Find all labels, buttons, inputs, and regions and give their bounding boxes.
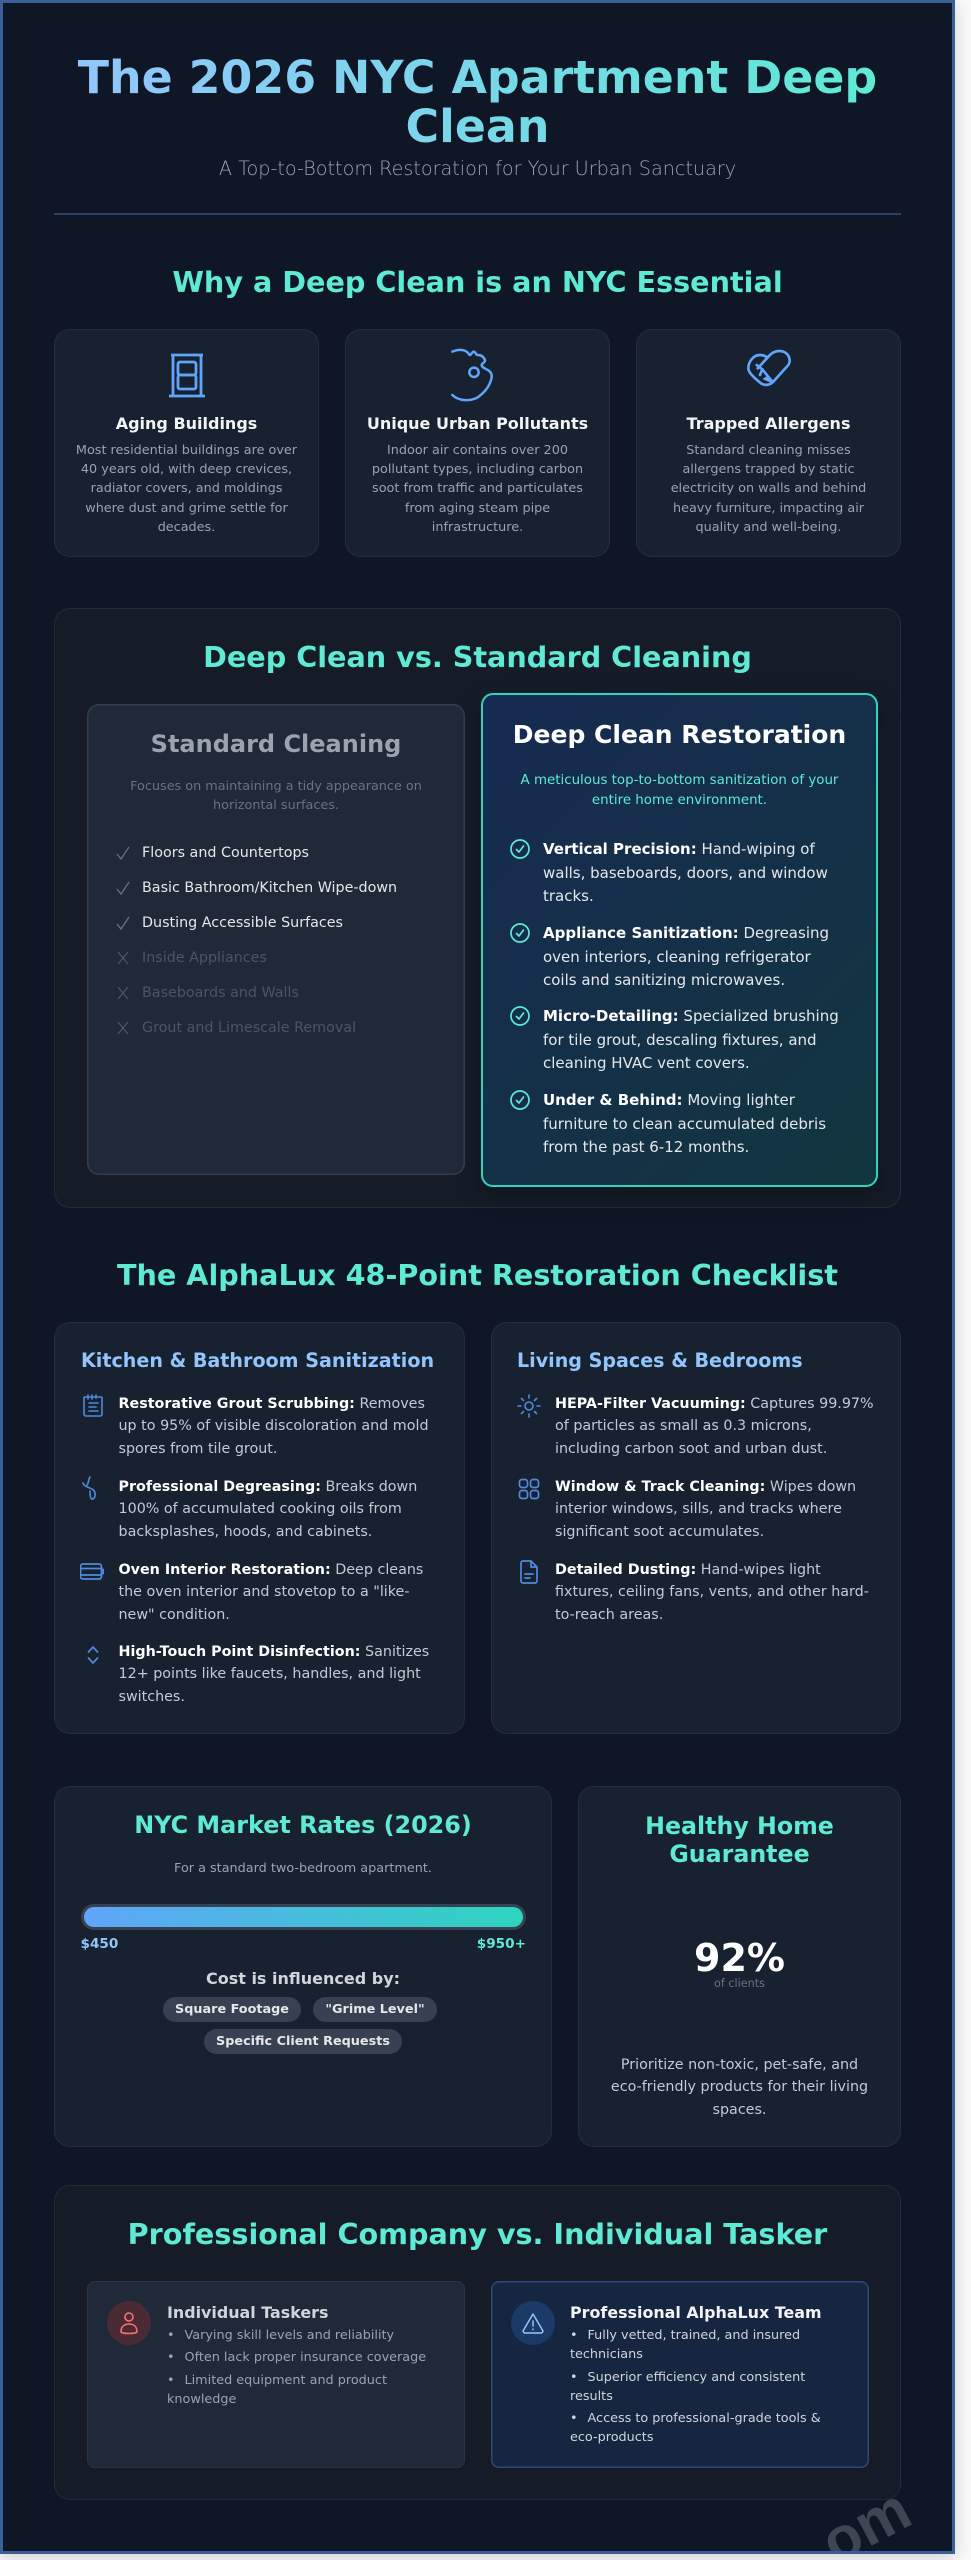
panel: company vs tasker — [54, 2185, 901, 2500]
included item: Floors and Countertops — [142, 845, 309, 861]
chip: "Grime Level" — [325, 2002, 425, 2017]
standard description — [130, 779, 422, 813]
standard title: Standard Cleaning — [151, 730, 401, 758]
checklist item: 100% of accumulated cooking oils from — [118, 1501, 402, 1517]
panel: market rates — [54, 1786, 552, 2147]
feature — [543, 840, 828, 905]
panel heading: Healthy Home — [645, 1812, 834, 1840]
team list: Access to professional-grade tools & — [588, 2411, 821, 2426]
checklist item — [555, 1562, 869, 1623]
team list: results — [570, 2389, 613, 2404]
tasker list: • — [167, 2328, 175, 2343]
card text: pollutant types, including carbon — [372, 462, 583, 477]
feature — [543, 924, 829, 989]
team list: • — [570, 2411, 578, 2426]
card title: Trapped Allergens — [687, 414, 850, 433]
icon: circle check — [510, 1006, 530, 1026]
deep clean description: A meticulous top-to-bottom sanitization of your — [521, 773, 838, 788]
included item: Dusting Accessible Surfaces — [142, 915, 343, 931]
checklist item: significant soot accumulates. — [555, 1524, 764, 1540]
feature: Under & Behind: Moving lighter — [543, 1091, 795, 1109]
deep clean description — [520, 773, 838, 808]
card text: allergens trapped by static — [682, 462, 855, 477]
high price: $950+ — [477, 1936, 526, 1952]
low price: $450 — [80, 1936, 118, 1952]
tasker list: Varying skill levels and reliability — [184, 2328, 394, 2343]
feature: for tile grout, descaling fixtures, and — [543, 1031, 817, 1049]
checklist item: High-Touch Point Disinfection: Sanitizes — [118, 1644, 429, 1660]
tasker list — [167, 2328, 426, 2407]
heading: Deep Clean vs. Standard Cleaning — [203, 640, 752, 674]
checklist item: Oven Interior Restoration: Deep cleans — [118, 1562, 423, 1578]
card text — [372, 443, 583, 535]
card title: Aging Buildings — [116, 414, 257, 433]
checklist item: Professional Degreasing: Breaks down — [118, 1479, 417, 1495]
card text: where dust and grime settle for — [85, 501, 288, 516]
heading: checklist: The AlphaLux 48-Point Restoration Checklist — [117, 1258, 838, 1292]
included item: Basic Bathroom/Kitchen Wipe-down — [142, 880, 397, 896]
icon: check — [116, 916, 130, 930]
card text: quality and well-being. — [696, 520, 841, 535]
icon: degrease — [82, 1476, 96, 1500]
checklist item: interior windows, sills, and tracks where — [555, 1501, 842, 1517]
feature: tracks. — [543, 887, 594, 905]
card text: Most residential buildings are over — [76, 443, 297, 458]
guarantee text: spaces. — [713, 2102, 766, 2118]
checklist item — [555, 1396, 874, 1457]
card text: decades. — [158, 520, 215, 535]
card text: infrastructure. — [432, 520, 523, 535]
icon: circle check — [510, 1090, 530, 1110]
panel: kitchen and bathroom — [54, 1322, 465, 1734]
feature: Micro-Detailing: Specialized brushing — [543, 1007, 839, 1025]
panel: trapped allergens — [636, 329, 901, 557]
team list: • — [570, 2328, 578, 2343]
feature — [543, 1007, 839, 1072]
checklist item: the oven interior and stovetop to a "like- — [118, 1584, 410, 1600]
panel title: Living Spaces & Bedrooms — [517, 1349, 803, 1372]
feature: Appliance Sanitization: Degreasing — [543, 924, 829, 942]
panel: living spaces — [491, 1322, 901, 1734]
checklist item — [118, 1396, 429, 1457]
icon: circle check — [510, 923, 530, 943]
panel: healthy home guarantee — [578, 1786, 901, 2147]
checklist item: backsplashes, hoods, and cabinets. — [118, 1524, 372, 1540]
standard description: horizontal surfaces. — [213, 798, 339, 813]
checklist item — [118, 1562, 423, 1623]
checklist item: including carbon soot and urban dust. — [555, 1441, 827, 1457]
checklist item: to-reach areas. — [555, 1607, 663, 1623]
tasker list: Often lack proper insurance coverage — [184, 2350, 426, 2365]
icon: up down chevrons — [88, 1646, 98, 1664]
panel: aging buildings — [54, 329, 319, 557]
checklist item — [118, 1479, 417, 1540]
tasker list: knowledge — [167, 2392, 236, 2407]
tasker list: • — [167, 2350, 175, 2365]
icon: check — [116, 882, 130, 895]
icon: cross — [118, 986, 128, 1000]
checklist item: Detailed Dusting: Hand-wipes light — [555, 1562, 821, 1578]
icon: alert triangle — [511, 2301, 555, 2345]
subtitle: A Top-to-Bottom Restoration for Your Urban Sanctuary — [219, 157, 736, 180]
title: The 2026 NYC Apartment Deep — [78, 50, 877, 104]
team list: eco-products — [570, 2430, 653, 2445]
tasker title: Individual Taskers — [167, 2303, 328, 2322]
checklist item: Window & Track Cleaning: Wipes down — [555, 1479, 856, 1495]
checklist item: new" condition. — [118, 1607, 230, 1623]
card text: Indoor air contains over 200 — [387, 443, 568, 458]
icon: circle check — [510, 839, 530, 859]
standard description: Focuses on maintaining a tidy appearance on — [130, 779, 422, 794]
guarantee text — [611, 2057, 868, 2118]
feature: walls, baseboards, doors, and window — [543, 864, 828, 882]
panel: standard cleaning — [87, 704, 465, 1175]
statistic label: of clients — [714, 1977, 765, 1990]
chip: Specific Client Requests — [216, 2034, 390, 2049]
excluded item: Inside Appliances — [142, 950, 267, 966]
icon: cross — [118, 952, 128, 964]
team list: • — [570, 2370, 578, 2385]
guarantee text: Prioritize non-toxic, pet-safe, and — [621, 2057, 858, 2073]
excluded item: Baseboards and Walls — [142, 985, 299, 1001]
checklist item: of particles as small as 0.3 microns, — [555, 1418, 812, 1434]
checklist item: HEPA-Filter Vacuuming: Captures 99.97% — [555, 1396, 874, 1412]
team title: Professional AlphaLux Team — [570, 2303, 822, 2322]
icon: grid — [518, 1478, 540, 1500]
checklist item: fixtures, ceiling fans, vents, and other hard- — [555, 1584, 869, 1600]
panel title: Kitchen & Bathroom Sanitization — [81, 1349, 434, 1372]
checklist item — [555, 1479, 856, 1540]
chip — [313, 1997, 437, 2022]
checklist item: up to 95% of visible discoloration and mold — [118, 1418, 429, 1434]
card text: 40 years old, with deep crevices, — [81, 462, 292, 477]
panel heading — [645, 1812, 834, 1868]
panel: urban pollutants — [345, 329, 610, 557]
feature — [543, 1091, 826, 1156]
tasker list: • — [167, 2373, 175, 2388]
card text — [76, 443, 297, 535]
panel: individual taskers — [87, 2281, 465, 2468]
statistic: 92% — [694, 1936, 785, 1980]
checklist item: Restorative Grout Scrubbing: Removes — [118, 1396, 425, 1412]
panel heading: Guarantee — [669, 1840, 810, 1868]
note: For a standard two-bedroom apartment. — [174, 1861, 432, 1876]
icon: sun — [517, 1394, 541, 1418]
card text: radiator covers, and moldings — [91, 481, 282, 496]
panel heading: NYC Market Rates (2026) — [134, 1811, 472, 1839]
icon: pollutants — [451, 348, 494, 402]
checklist item: spores from tile grout. — [118, 1441, 277, 1457]
feature: coils and sanitizing microwaves. — [543, 971, 785, 989]
card text: soot from traffic and particulates — [372, 481, 583, 496]
card text: electricity on walls and behind — [671, 481, 866, 496]
heading: why a deep clean: Why a Deep Clean is an NYC Essential — [172, 264, 783, 298]
tasker list: Limited equipment and product — [184, 2373, 387, 2388]
card title: Unique Urban Pollutants — [367, 414, 588, 433]
team list — [570, 2326, 821, 2451]
card text: Standard cleaning misses — [686, 443, 851, 458]
deep clean description: entire home environment. — [592, 793, 767, 808]
title: Clean — [406, 99, 549, 153]
chip: Square Footage — [175, 2002, 289, 2017]
deep clean title: Deep Clean Restoration — [513, 720, 846, 749]
card text: from aging steam pipe — [405, 501, 550, 516]
icon: check — [116, 846, 130, 860]
feature: cleaning HVAC vent covers. — [543, 1054, 750, 1072]
card text — [671, 443, 866, 535]
chip — [163, 1997, 301, 2022]
card text: heavy furniture, impacting air — [673, 501, 864, 516]
team list: Superior efficiency and consistent — [588, 2370, 805, 2385]
icon: clipboard — [83, 1394, 103, 1417]
panel: deep clean restoration — [481, 693, 878, 1187]
icon: cross — [118, 1022, 128, 1034]
team list: technicians — [570, 2347, 643, 2362]
icon: document — [520, 1560, 538, 1584]
cost factors heading: Cost is influenced by: — [206, 1969, 400, 1988]
icon: pills — [747, 350, 792, 386]
panel: deep clean vs standard — [54, 608, 901, 1208]
heading: Professional Company vs. Individual Tasker — [128, 2216, 827, 2250]
feature: oven interiors, cleaning refrigerator — [543, 948, 811, 966]
feature: from the past 6-12 months. — [543, 1138, 749, 1156]
team list: Fully vetted, trained, and insured — [588, 2328, 800, 2343]
icon: person — [107, 2301, 151, 2345]
feature: Vertical Precision: Hand-wiping of — [543, 840, 815, 858]
panel: professional team — [491, 2281, 869, 2468]
guarantee text: eco-friendly products for their living — [611, 2079, 868, 2095]
title — [78, 50, 877, 153]
feature: furniture to clean accumulated debris — [543, 1115, 826, 1133]
excluded item: Grout and Limescale Removal — [142, 1020, 356, 1036]
checklist item: 12+ points like faucets, handles, and light — [118, 1666, 421, 1682]
icon: building — [169, 354, 205, 398]
checklist item — [118, 1644, 429, 1705]
chip — [204, 2029, 402, 2054]
price range bar — [81, 1904, 526, 1930]
checklist item: switches. — [118, 1689, 185, 1705]
icon: oven — [80, 1563, 104, 1580]
